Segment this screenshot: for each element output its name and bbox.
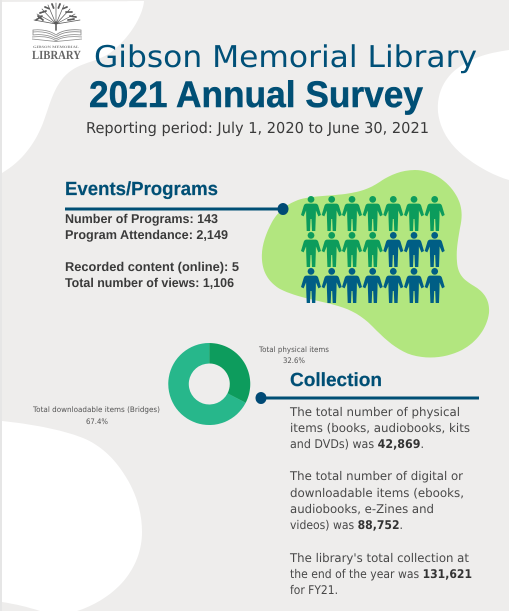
logo: Gibson Memorial Library [32, 3, 82, 62]
events statistics: Number of Programs: 143 [65, 211, 218, 226]
label: downloadable items: 67.4% [86, 417, 108, 426]
white blob: top left [2, 1, 144, 173]
panel: collection [256, 370, 479, 597]
logo book [32, 30, 82, 42]
people row 2 [301, 232, 445, 267]
collection text: total: the end of the year was 131,621 [290, 567, 472, 581]
events connector line [65, 203, 288, 215]
label: downloadable items: Total downloadable items (Bridges) [32, 405, 160, 414]
collection text: physical items: items (books, audiobooks, kits [290, 421, 470, 435]
panel: events and programs [65, 179, 288, 290]
label: physical items: Total physical items [258, 345, 329, 354]
people row 1 [301, 196, 445, 231]
donut segment: physical [209, 343, 250, 403]
events statistics: Recorded content (online): 5 [65, 259, 239, 274]
people row 3 [301, 268, 445, 303]
events statistics: Program Attendance: 2,149 [65, 227, 228, 242]
collection connector line [256, 392, 479, 404]
events statistics [65, 211, 239, 290]
collection text: digital items: downloadable items (ebooks, [290, 486, 464, 500]
donut segment: downloadable [168, 343, 246, 425]
label: physical items: 32.6% [283, 356, 305, 365]
events statistics: Total number of views: 1,106 [65, 275, 234, 290]
label: downloadable items [32, 405, 160, 426]
collection text: digital items: videos) was 88,752. [290, 518, 403, 532]
label: physical items [258, 345, 329, 365]
events heading: Events/Programs [65, 179, 218, 200]
white blob: top right [438, 50, 509, 180]
collection text: physical items: and DVDs) was 42,869. [290, 437, 424, 451]
collection text: digital items [289, 469, 464, 532]
title: Gibson Memorial Library [94, 40, 477, 75]
subtitle: 2021 Annual Survey [89, 74, 423, 115]
collection text: total [289, 551, 472, 597]
green blob [262, 170, 489, 357]
white blob: bottom left [2, 421, 142, 611]
collection text: digital items: audiobooks, e-Zines and [290, 502, 434, 516]
collection text: physical items: The total number of physical [289, 405, 460, 419]
collection text: total: for FY21. [290, 583, 338, 597]
logo text small: GIBSON MEMORIAL [33, 45, 80, 49]
reporting period: Reporting period: July 1, 2020 to June 30, 2021 [86, 119, 429, 137]
donut chart [32, 343, 329, 426]
logo wordmark: LIBRARY [32, 48, 81, 62]
pictogram: people [301, 196, 445, 303]
collection heading: Collection [290, 370, 382, 391]
collection text: digital items: The total number of digital or [289, 469, 463, 483]
collection text: total: The library's total collection at [289, 551, 469, 565]
logo tree [34, 3, 80, 30]
collection text: physical items [289, 405, 470, 451]
left edge strip [0, 0, 2, 611]
